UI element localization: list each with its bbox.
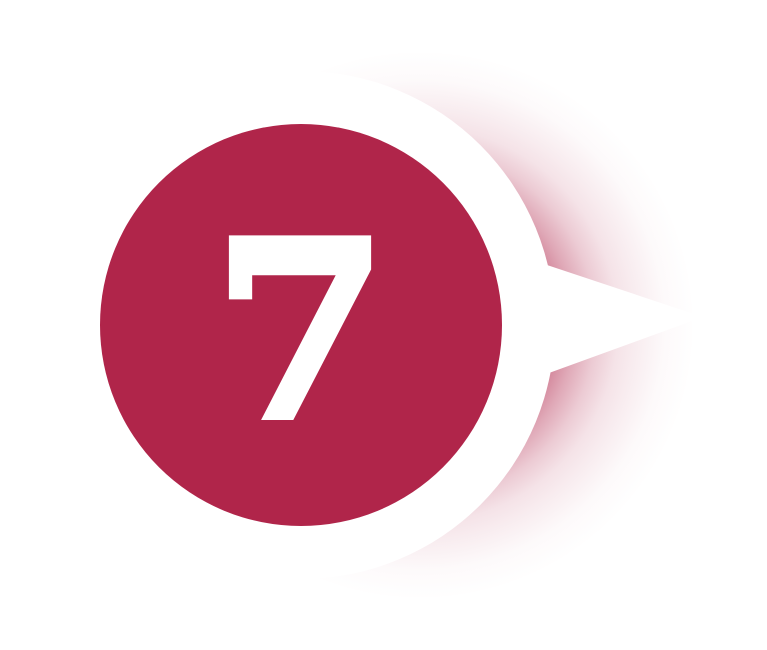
number seven: 7 — [212, 187, 389, 475]
soft shadow behind badge — [145, 50, 695, 600]
badge: white pointer outline — [47, 71, 703, 579]
badge: crimson circle — [100, 124, 502, 526]
